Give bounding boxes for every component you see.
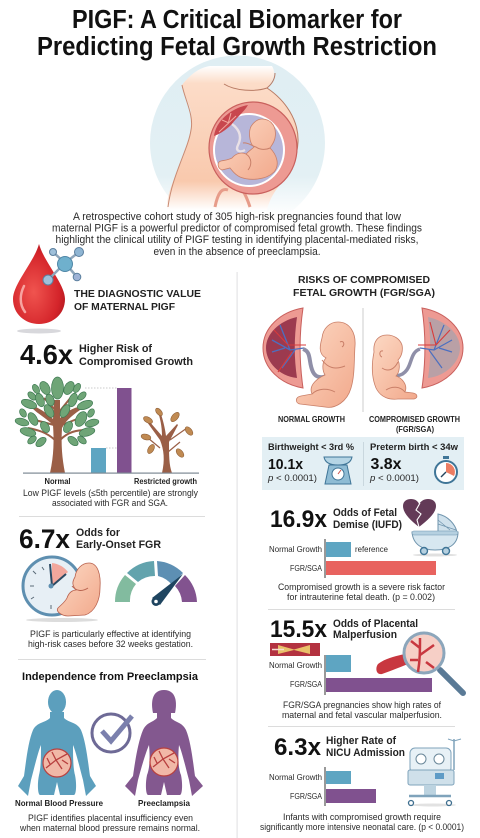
- stat: 4.6x higher risk: Higher Risk of: [79, 343, 152, 355]
- caption: NICU: significantly more intensive neonatal care. (p < 0.0001): [260, 822, 464, 832]
- bar chart: malperfusion: [269, 655, 432, 695]
- labels: growth comparison: (FGR/SGA): [396, 425, 434, 434]
- intro paragraph: maternal PIGF is a powerful predictor of compromised fetal growth. These findings: [52, 222, 422, 234]
- heading: diagnostic value: OF MATERNAL PIGF: [74, 301, 176, 313]
- stat: birthweight: Birthweight < 3rd %: [268, 442, 355, 453]
- icon: scale: [324, 457, 352, 484]
- caption: independence: when maternal blood pressure remains normal.: [19, 823, 200, 833]
- stat: 6.7x early-onset: [19, 524, 161, 554]
- stat: birthweight: 10.1x: [268, 456, 304, 473]
- icon: narrowed vessel: [270, 643, 320, 656]
- illustration: compromised growth placenta and fetus: [372, 308, 463, 399]
- heading: independence from preeclampsia: Independence from Preeclampsia: [22, 671, 199, 683]
- icon: placenta in body: [43, 749, 71, 777]
- intro paragraph: A retrospective cohort study of 305 high-risk pregnancies found that low: [73, 211, 402, 223]
- icon: broken heart: [403, 499, 436, 527]
- stat: 15.5x placental malperfusion: 15.5x: [270, 616, 328, 643]
- labels: body figures: Preeclampsia: [138, 798, 190, 808]
- chart: normal vs restricted growth with trees: Restricted growth: [134, 477, 197, 486]
- heading: risks of compromised growth: FETAL GROWTH (FGR/SGA): [293, 287, 435, 299]
- stat: 15.5x placental malperfusion: Malperfusion: [333, 629, 397, 641]
- icon: clock with fetus: [23, 557, 100, 622]
- chart: normal vs restricted growth with trees: [14, 377, 199, 486]
- labels: body figures: [15, 798, 190, 808]
- stat: 15.5x placental malperfusion: Odds of Placental: [333, 618, 418, 630]
- icon: stopwatch: [435, 456, 457, 483]
- icon: bare tree: [140, 407, 194, 473]
- caption: NICU: Infants with compromised growth require: [283, 812, 441, 822]
- icon: placenta in body 2: [150, 748, 178, 776]
- bar: normal: [91, 448, 106, 473]
- stat: 6.7x early-onset: Odds for: [76, 527, 121, 539]
- panel: birthweight and preterm stats: [262, 437, 464, 490]
- title: Predicting Fetal Growth Restriction: [37, 33, 437, 61]
- illustration: normal growth placenta and fetus: [263, 308, 355, 407]
- stat: preterm: p < 0.0001): [369, 473, 419, 483]
- figure: preeclampsia body: [125, 690, 203, 796]
- caption: low PIGF levels: associated with FGR and SGA.: [52, 498, 168, 508]
- labels: body figures: Normal Blood Pressure: [15, 798, 103, 808]
- caption: early onset: [28, 629, 193, 649]
- intro paragraph: [52, 211, 422, 258]
- stat: 4.6x higher risk: 4.6x: [20, 339, 74, 370]
- heading: risks of compromised growth: RISKS OF COMPROMISED: [298, 274, 430, 286]
- caption: fetal demise: [278, 582, 445, 602]
- bar chart: malperfusion: Normal Growth: [269, 660, 322, 670]
- bar: restricted: [117, 388, 132, 473]
- stat: 16.9x fetal demise: Demise (IUFD): [333, 519, 402, 531]
- caption: low PIGF levels: [23, 488, 198, 508]
- stat: 4.6x higher risk: [20, 339, 193, 370]
- figure: normal blood pressure body: [18, 690, 96, 796]
- column divider: [236, 272, 238, 838]
- intro paragraph: highlight the clinical utility of PIGF testing in identifying placental-mediated risks,: [56, 234, 418, 246]
- stat: preterm: 3.8x: [370, 456, 402, 473]
- stat: 15.5x placental malperfusion: [270, 616, 418, 643]
- heading: risks of compromised growth: [293, 274, 435, 299]
- chart: normal vs restricted growth with trees: Normal: [44, 477, 70, 486]
- illustration: pregnant body cross-section with fetus: [52, 56, 422, 258]
- bar chart: fetal demise: [269, 539, 436, 578]
- caption: independence: PIGF identifies placental insufficiency even: [28, 813, 193, 823]
- stat: birthweight: [267, 442, 355, 483]
- stat: 6.3x NICU admission: 6.3x: [274, 734, 322, 761]
- bar chart: malperfusion: FGR/SGA: [290, 679, 322, 689]
- title: [37, 6, 437, 61]
- labels: growth comparison: [278, 415, 460, 434]
- caption: malperfusion: [282, 700, 442, 720]
- icon: neonatal incubator: [408, 739, 461, 806]
- stat: 6.3x NICU admission: [274, 734, 405, 761]
- caption: fetal demise: for intrauterine fetal death. (p = 0.002): [287, 592, 435, 602]
- stat: birthweight: p < 0.0001): [267, 473, 317, 483]
- caption: fetal demise: Compromised growth is a severe risk factor: [278, 582, 445, 592]
- bar chart: NICU: [269, 767, 376, 806]
- icon: risk gauge: [115, 561, 197, 606]
- stat: 6.7x early-onset: Early-Onset FGR: [76, 539, 161, 551]
- stat: preterm: [369, 442, 459, 483]
- stat: preterm: Preterm birth < 34w: [370, 442, 459, 453]
- caption: early onset: PIGF is particularly effective at identifying: [30, 629, 191, 639]
- intro paragraph: even in the absence of preeclampsia.: [154, 246, 320, 258]
- caption: low PIGF levels: Low PIGF levels (≤5th percentile) are strongly: [23, 488, 198, 498]
- stat: 4.6x higher risk: Compromised Growth: [79, 356, 193, 368]
- caption: malperfusion: maternal and fetal vascular malperfusion.: [282, 710, 442, 720]
- icon: magnifier on placental vessels: [376, 633, 463, 693]
- labels: growth comparison: COMPROMISED GROWTH: [369, 415, 460, 424]
- icon: check mark circle: [92, 714, 132, 752]
- stat: 6.3x NICU admission: NICU Admission: [326, 747, 405, 759]
- caption: malperfusion: FGR/SGA pregnancies show high rates of: [283, 700, 441, 710]
- stat: 6.3x NICU admission: Higher Rate of: [326, 735, 396, 747]
- heading: diagnostic value: THE DIAGNOSTIC VALUE: [74, 288, 201, 300]
- icon: blood drop with molecule: [13, 244, 84, 334]
- bar chart: fetal demise: reference: [355, 544, 388, 554]
- stat: 16.9x fetal demise: 16.9x: [270, 506, 328, 533]
- icon: healthy tree: [14, 377, 100, 473]
- bar chart: NICU: FGR/SGA: [290, 791, 322, 801]
- bar chart: fetal demise: Normal Growth: [269, 544, 322, 554]
- caption: independence: [19, 813, 200, 833]
- stat: 6.7x early-onset: 6.7x: [19, 524, 70, 554]
- bar chart: fetal demise: FGR/SGA: [290, 563, 322, 573]
- title: PIGF: A Critical Biomarker for: [72, 6, 402, 34]
- stat: 16.9x fetal demise: [270, 506, 402, 533]
- labels: growth comparison: NORMAL GROWTH: [278, 415, 345, 424]
- stat: 16.9x fetal demise: Odds of Fetal: [333, 507, 397, 519]
- heading: diagnostic value: [74, 288, 201, 313]
- caption: early onset: high-risk cases before 32 weeks gestation.: [28, 639, 193, 649]
- caption: NICU: [260, 812, 464, 832]
- icon: baby pram: [412, 514, 458, 556]
- bar chart: NICU: Normal Growth: [269, 772, 322, 782]
